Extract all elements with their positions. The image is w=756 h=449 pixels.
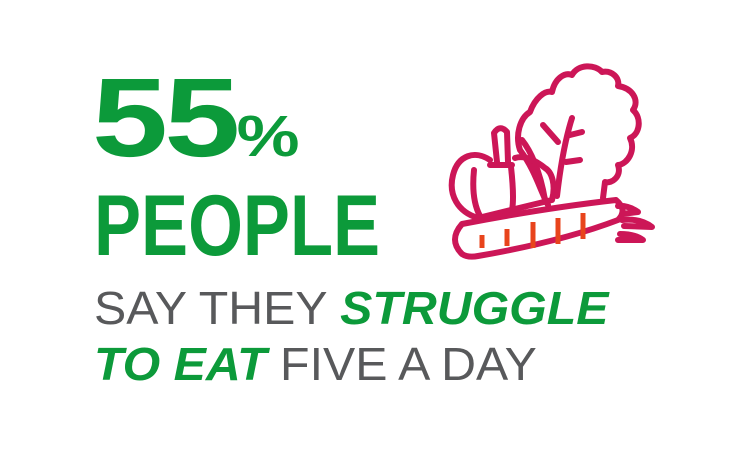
pumpkin	[452, 128, 554, 218]
text block: statement: SAY THEY STRUGGLE	[94, 282, 608, 334]
headline: 55%: 55%	[92, 55, 300, 180]
carrot	[455, 200, 652, 257]
lettuce	[518, 66, 639, 205]
text block: statement	[94, 282, 610, 390]
text block: statement: TO EAT FIVE A DAY	[94, 338, 537, 390]
icon: vegetables	[448, 63, 655, 260]
headline: PEOPLE: PEOPLE	[94, 178, 380, 274]
